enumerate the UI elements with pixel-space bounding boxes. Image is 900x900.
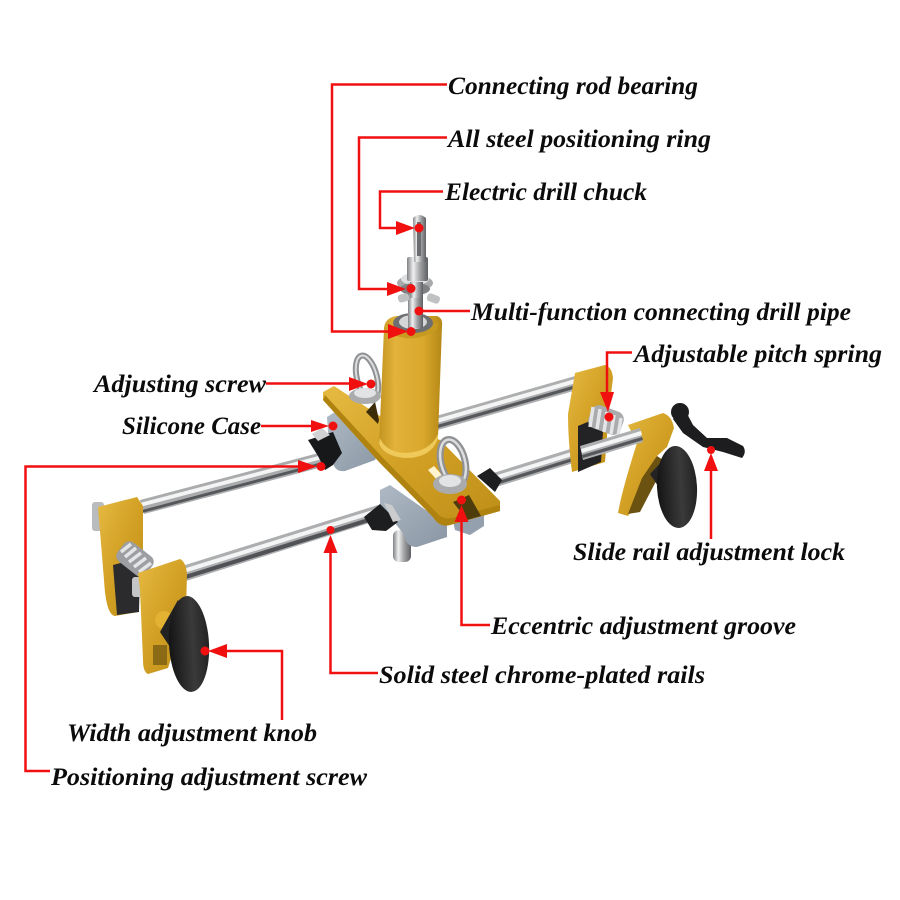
tool illustration [92, 215, 745, 693]
callout: connecting rod bearing: Connecting rod bearing [448, 73, 698, 100]
callout: adjusting screw [92, 371, 376, 398]
callout: slide rail adjustment lock [573, 446, 846, 566]
left front clamp [132, 559, 187, 674]
callout: adjusting screw: Adjusting screw [92, 371, 266, 398]
upper guide rail [140, 374, 584, 514]
slide rail lock lever [671, 403, 745, 458]
right knob [650, 445, 699, 529]
width adjustment knob [160, 595, 211, 693]
callout: positioning adjustment screw: Positioning adjustment screw [50, 764, 367, 791]
callout: solid steel chrome-plated rails [324, 526, 705, 689]
right front clamp [580, 413, 674, 516]
gold column [379, 316, 442, 458]
right eye bolt [433, 437, 470, 494]
left spring [113, 538, 157, 580]
callout: all steel positioning ring: All steel positioning ring [446, 126, 711, 153]
callout: all steel positioning ring [359, 126, 711, 296]
callout: width adjustment knob [67, 644, 317, 747]
callout: adjustable pitch spring: Adjustable pitch spring [632, 341, 882, 368]
right spring [586, 403, 626, 437]
callout: multi-function connecting drill pipe: Multi-function connecting drill pipe [470, 299, 851, 326]
callout: slide rail adjustment lock: Slide rail adjustment lock [573, 539, 846, 566]
callout: eccentric adjustment groove [454, 496, 796, 640]
left silicone case [308, 412, 382, 471]
electric drill chuck shank [413, 215, 426, 262]
gold cross bar [323, 386, 500, 526]
left eye bolt [349, 353, 382, 404]
callout: silicone case: Silicone Case [122, 413, 261, 440]
callout: electric drill chuck [380, 179, 647, 235]
left rear clamp [92, 497, 143, 616]
right rear clamp [568, 365, 613, 472]
callout: solid steel chrome-plated rails: Solid steel chrome-plated rails [379, 662, 705, 689]
positioning ring nuts [397, 257, 441, 304]
callout: adjustable pitch spring [600, 341, 882, 422]
callout: electric drill chuck: Electric drill chuck [444, 179, 647, 206]
callout: width adjustment knob: Width adjustment knob [67, 720, 317, 747]
lower silicone case [364, 468, 502, 562]
callout: positioning adjustment screw [26, 460, 367, 791]
callout: connecting rod bearing [332, 73, 698, 339]
multi-function connecting drill pipe [393, 262, 433, 333]
callout: eccentric adjustment groove: Eccentric adjustment groove [490, 613, 796, 640]
callout: silicone case [122, 413, 338, 440]
lower guide rail [182, 446, 583, 581]
